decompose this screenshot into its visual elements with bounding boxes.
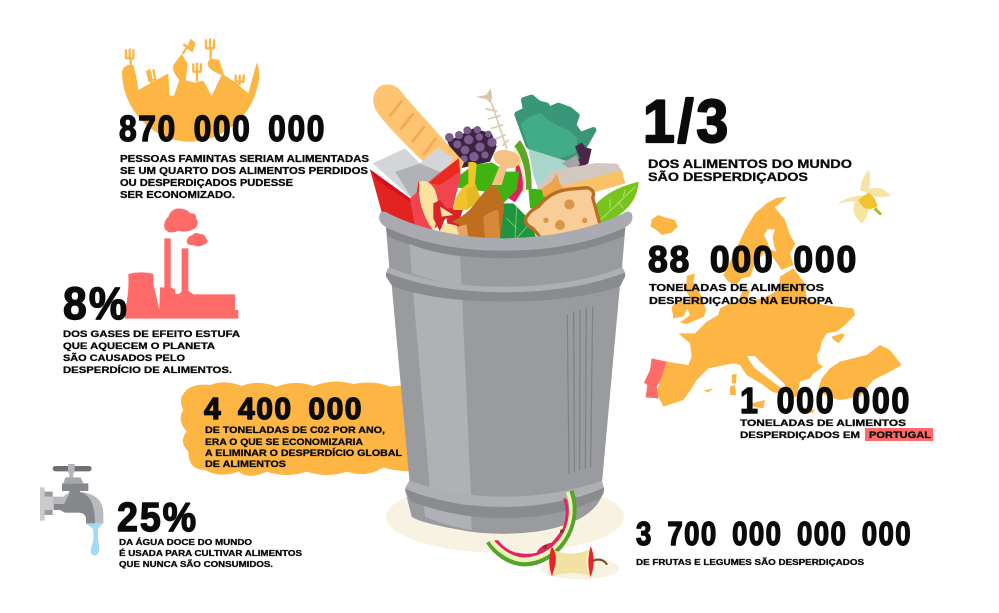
heading: 88 000 000: 88 000 000 <box>648 239 858 280</box>
banana <box>453 162 482 210</box>
Iceland <box>651 215 678 235</box>
chicken drumstick <box>492 150 521 185</box>
text: CO2 savings: ERA O QUE SE ECONOMIZARIA <box>205 437 363 448</box>
text: greenhouse gases: DOS GASES DE EFEITO ESTUFA <box>63 329 240 340</box>
text: greenhouse gases: QUE AQUECEM O PLANETA <box>63 341 215 352</box>
text: CO2 savings: DE TONELADAS DE C02 POR ANO, <box>205 425 385 436</box>
text: CO2 savings <box>205 425 402 470</box>
text: Europe tonnes <box>649 283 833 307</box>
plastic bag <box>528 149 580 190</box>
text: Europe tonnes: DESPERDIÇADOS NA EUROPA <box>649 296 833 307</box>
panel: Europe map <box>644 197 902 413</box>
cardboard carton <box>373 148 420 198</box>
text: CO2 savings: A ELIMINAR O DESPERDÍCIO GLOBAL <box>205 447 402 459</box>
text: fresh water: É USADA PARA CULTIVAR ALIMENTOS <box>119 548 302 558</box>
heading: 4 400 000: 4 400 000 <box>204 391 363 426</box>
text: hungry people: SE UM QUARTO DOS ALIMENTOS PERDIDOS <box>120 166 368 177</box>
watermelon rind <box>514 140 532 190</box>
Sicily <box>752 400 765 408</box>
Sardinia <box>730 385 736 395</box>
text: Portugal tonnes <box>740 418 933 441</box>
Ireland <box>672 301 687 318</box>
apple slices <box>419 181 438 232</box>
leafy greens <box>452 162 519 203</box>
text: one third wasted: SÃO DESPERDIÇADOS <box>648 169 808 184</box>
icon: water tap <box>40 464 103 556</box>
text: hungry people: PESSOAS FAMINTAS SERIAM ALIMENTADAS <box>120 154 369 165</box>
text: greenhouse gases: DESPERDÍCIO DE ALIMENTOS. <box>63 364 232 376</box>
bottom of bin <box>407 497 602 534</box>
text: fresh water: DA ÁGUA DOCE DO MUNDO <box>119 537 252 547</box>
heading: 1 000 000: 1 000 000 <box>740 380 911 421</box>
tap flange <box>40 487 53 521</box>
Crete <box>803 409 815 413</box>
cheese <box>539 164 622 192</box>
tap body <box>53 492 103 523</box>
icon: factory <box>125 208 238 319</box>
Britain <box>680 273 706 324</box>
text: hungry people: OU DESPERDIÇADOS PUDESSE <box>120 178 293 189</box>
heading: 870 000 000: 870 000 000 <box>119 108 326 149</box>
bin upper body <box>386 227 625 287</box>
text: fruit and vegetables: DE FRUTAS E LEGUMES SÃO DESPERDIÇADOS <box>636 557 864 567</box>
heading: 1/3: 1/3 <box>643 88 731 155</box>
bottom ring <box>405 487 604 518</box>
Continental Europe <box>657 268 902 413</box>
panel: orange cloud <box>181 382 412 476</box>
text: Portugal tonnes: DESPERDIÇADOS EM <box>740 430 860 441</box>
text: Portugal tonnes: PORTUGAL <box>869 430 931 441</box>
lettuce <box>517 98 593 160</box>
grapes <box>447 128 497 168</box>
bread slice <box>526 188 601 240</box>
baguette <box>373 84 464 188</box>
text: one third wasted: DOS ALIMENTOS DO MUNDO <box>648 157 852 171</box>
Portugal <box>644 358 667 398</box>
upper ring <box>386 267 625 302</box>
bin lower body <box>392 285 620 500</box>
ventilation ribs <box>567 307 593 474</box>
bin rim <box>379 212 632 251</box>
water drop <box>85 523 103 556</box>
Scandinavia <box>723 197 795 285</box>
heading: 8%: 8% <box>63 278 129 329</box>
text: fresh water <box>119 537 302 569</box>
icon: food in the bin <box>369 84 639 240</box>
text: hungry people <box>120 154 369 201</box>
Denmark <box>738 288 753 307</box>
text: fresh water: QUE NUNCA SÃO CONSUMIDOS. <box>119 559 273 569</box>
text: greenhouse gases: SÃO CAUSADOS PELO <box>63 353 186 364</box>
heading: 25%: 25% <box>117 494 198 540</box>
icon: trash bin <box>379 212 632 534</box>
text: Portugal tonnes: TONELADAS DE ALIMENTOS <box>740 418 907 429</box>
green leaf <box>595 182 639 225</box>
text: hungry people: SER ECONOMIZADO. <box>120 190 235 201</box>
fish bone <box>486 103 508 148</box>
shadow under bin <box>386 481 624 553</box>
Balearic <box>703 388 713 392</box>
icon: banana peel <box>837 170 891 223</box>
icon: apple core <box>541 546 619 579</box>
icon: hungry crowd with forks <box>122 38 259 142</box>
text: one third wasted <box>648 157 852 184</box>
Corsica <box>732 373 737 383</box>
Turkey <box>818 345 902 400</box>
text: CO2 savings: DE ALIMENTOS <box>205 459 287 470</box>
heading: 3 700 000 000 000: 3 700 000 000 000 <box>636 515 912 552</box>
Crimea <box>832 333 845 343</box>
icon: watermelon rind on floor <box>488 491 574 564</box>
aubergine peel <box>567 143 592 170</box>
text: Europe tonnes: TONELADAS DE ALIMENTOS <box>649 283 824 294</box>
text: greenhouse gases <box>63 329 240 376</box>
